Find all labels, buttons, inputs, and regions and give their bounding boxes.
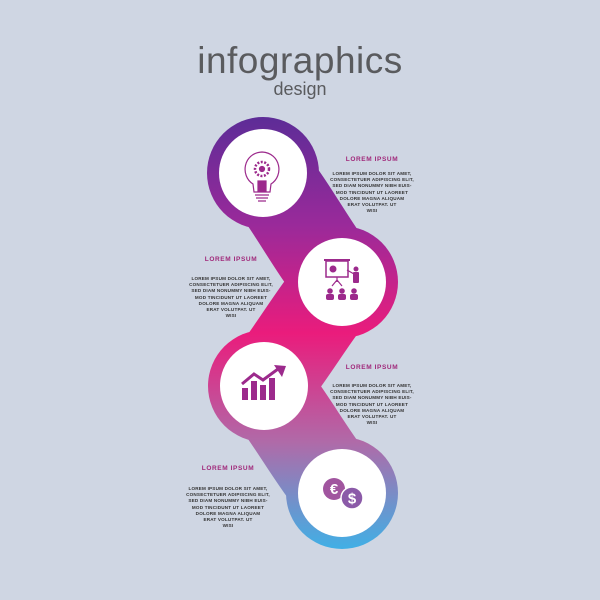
body 4 [186,486,270,528]
text block 2 [189,256,273,318]
icon: presentation [324,259,359,300]
body 4: CONSECTETUER ADIPISCING ELIT, [186,492,270,497]
heading 2: LOREM IPSUM [205,256,257,263]
body 3 [330,383,414,425]
body 2: MOD TINCIDUNT UT LAOREET [195,295,267,300]
body 2 [189,276,273,318]
heading 3: LOREM IPSUM [346,364,398,371]
subtitle: design [273,79,327,99]
body 4: DOLORE MAGNA ALIQUAM [196,511,260,516]
body 1: WISI [367,208,377,213]
body 2: CONSECTETUER ADIPISCING ELIT, [189,282,273,287]
body 4: WISI [223,523,233,528]
body 1: DOLORE MAGNA ALIQUAM [340,196,404,201]
circle 4 white [298,449,386,537]
body 1: SED DIAM NONUMMY NIBH EUIS- [332,183,412,188]
body 1: MOD TINCIDUNT UT LAOREET [336,190,408,195]
heading 4: LOREM IPSUM [202,465,254,472]
icon: currency coins: € [330,481,339,498]
body 2: WISI [226,313,236,318]
body 3: DOLORE MAGNA ALIQUAM [340,408,404,413]
icon: growth chart [242,365,286,400]
body 4: ERAT VOLUTPAT. UT [203,517,253,522]
icon: currency coins [323,478,363,509]
body 3: MOD TINCIDUNT UT LAOREET [336,402,408,407]
body 4: LOREM IPSUM DOLOR SIT AMET, [188,486,267,491]
text block 1 [330,156,414,213]
circle 3 white [220,342,308,430]
body 4: SED DIAM NONUMMY NIBH EUIS- [188,498,268,503]
body 3: WISI [367,420,377,425]
body 3: ERAT VOLUTPAT. UT [347,414,397,419]
body 3: LOREM IPSUM DOLOR SIT AMET, [332,383,411,388]
body 3: SED DIAM NONUMMY NIBH EUIS- [332,395,412,400]
body 1: CONSECTETUER ADIPISCING ELIT, [330,177,414,182]
circle 2 white [298,238,386,326]
title: infographics [197,40,403,81]
text block 4 [186,465,270,528]
body 2: SED DIAM NONUMMY NIBH EUIS- [191,288,271,293]
heading 1: LOREM IPSUM [346,156,398,163]
body 2: ERAT VOLUTPAT. UT [206,307,256,312]
body 3: CONSECTETUER ADIPISCING ELIT, [330,389,414,394]
body 1 [330,171,414,213]
icon: currency coins: $ [348,490,357,508]
icon: lightbulb gear [245,152,279,201]
body 2: LOREM IPSUM DOLOR SIT AMET, [192,276,270,281]
body 1: ERAT VOLUTPAT. UT [347,202,397,207]
text block 3 [330,364,414,425]
circle 1 white [219,129,307,217]
body 1: LOREM IPSUM DOLOR SIT AMET, [332,171,411,176]
body 4: MOD TINCIDUNT UT LAOREET [192,505,264,510]
body 2: DOLORE MAGNA ALIQUAM [199,301,263,306]
